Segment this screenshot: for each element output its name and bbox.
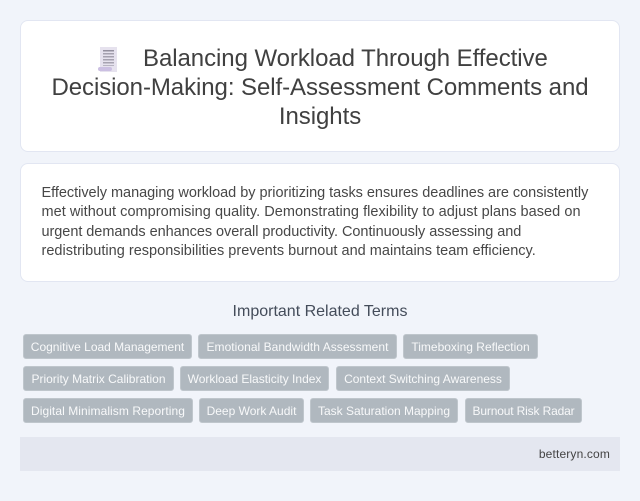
tag: Burnout Risk Radar xyxy=(472,404,574,418)
icon: document scroll xyxy=(98,47,117,72)
tag xyxy=(198,334,397,359)
tag xyxy=(23,366,174,391)
tag xyxy=(336,366,510,391)
tag xyxy=(403,334,538,359)
text block: summary: urgent demands enhances overall productivity. Continuously assessing and xyxy=(42,224,521,240)
footer text: site name: betteryn.com xyxy=(539,447,610,461)
tag xyxy=(23,334,192,359)
panel: summary paragraph xyxy=(20,163,620,282)
panel: title card xyxy=(20,20,620,152)
title: Balancing Workload Through Effective xyxy=(143,45,548,72)
text block: summary: Effectively managing workload by prioritizing tasks ensures deadlines are consistently xyxy=(42,185,588,201)
tag: Priority Matrix Calibration xyxy=(31,372,166,386)
text block: summary: met without compromising quality. Demonstrating flexibility to adjust plans based on xyxy=(42,204,581,220)
tag: Deep Work Audit xyxy=(207,404,296,418)
tag xyxy=(180,366,329,391)
title: Decision-Making: Self-Assessment Comments and xyxy=(51,74,589,101)
tag xyxy=(199,398,304,423)
tag: Emotional Bandwidth Assessment xyxy=(207,340,388,354)
tag xyxy=(465,398,582,423)
footer bar xyxy=(20,437,620,471)
title xyxy=(51,45,589,130)
tag: Timeboxing Reflection xyxy=(411,340,530,354)
panel: related terms tags xyxy=(23,334,582,423)
text block: summary: redistributing responsibilities prevents burnout and maintains team efficiency. xyxy=(42,243,536,259)
text block: summary xyxy=(42,185,588,259)
tag: Cognitive Load Management xyxy=(31,340,184,354)
tag xyxy=(310,398,458,423)
tag: Digital Minimalism Reporting xyxy=(31,404,185,418)
heading: important related terms: Important Related Terms xyxy=(233,303,407,320)
tag: Task Saturation Mapping xyxy=(318,404,450,418)
tag xyxy=(23,398,193,423)
tag: Workload Elasticity Index xyxy=(188,372,321,386)
tag: Context Switching Awareness xyxy=(344,372,502,386)
title: Insights xyxy=(279,103,361,130)
